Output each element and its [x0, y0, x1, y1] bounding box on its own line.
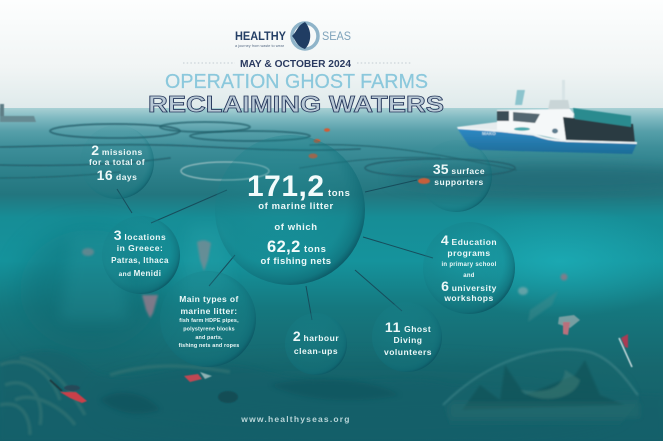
logo — [235, 22, 351, 49]
panel: 3 locations: Patras, Ithaca — [111, 256, 169, 265]
panel: 2 missions: for a total of — [89, 157, 145, 167]
panel: main types of litter: marine litter: — [180, 306, 238, 316]
panel: 2 missions: 16 days — [97, 167, 137, 183]
panel: education: 4 Education — [441, 232, 497, 248]
diver with fin near cage — [558, 315, 632, 367]
panel: 3 locations — [102, 216, 180, 294]
lower seabed and ropes — [0, 350, 663, 441]
panel: harbour clean-ups — [285, 313, 347, 375]
panel: main types of litter: Main types of — [179, 294, 239, 304]
panel: harbour clean-ups: 2 harbour — [293, 328, 339, 344]
panel: main types of litter — [160, 271, 256, 367]
surface fish farm nets — [0, 122, 516, 180]
title: operation ghost farms: OPERATION GHOST FARMS — [165, 70, 428, 93]
panel: 35 surface supporters: supporters — [434, 177, 484, 187]
sky background — [0, 0, 663, 112]
panel: 3 locations: in Greece: — [117, 243, 163, 253]
panel: main total: tons — [328, 188, 350, 199]
research boat: MAKO — [482, 131, 496, 136]
panel: 2 missions — [80, 125, 154, 199]
diver left — [50, 380, 87, 403]
panel: ghost diving volunteers: volunteers — [384, 347, 432, 357]
logo: SEAS — [322, 31, 351, 43]
panel: main total: 171,2 — [247, 170, 325, 203]
panel: 2 missions: 2 missions — [91, 142, 143, 158]
panel: main total — [215, 135, 365, 285]
panel: main types of litter: fishing nets and ropes — [179, 343, 239, 349]
panel: education: 6 university — [441, 278, 497, 294]
panel: 3 locations: and Menidi — [119, 269, 161, 278]
date heading: MAY & OCTOBER 2024 — [240, 59, 351, 70]
panel: main total: of marine litter — [258, 201, 334, 212]
panel: ghost diving volunteers: Diving — [394, 335, 422, 345]
panel: harbour clean-ups: clean-ups — [294, 346, 338, 356]
panel: education: and — [463, 273, 475, 279]
light beams and jellyfish — [60, 225, 568, 322]
title: reclaiming waters: RECLAIMING WATERS — [148, 91, 444, 117]
panel: main total: tons — [304, 244, 326, 255]
panel: main types of litter: fish farm HDPE pipes, — [179, 318, 239, 324]
panel: 3 locations: 3 locations — [114, 227, 166, 243]
panel: education — [423, 222, 515, 314]
sea background — [0, 108, 663, 441]
underwater fish cage — [443, 349, 640, 425]
panel: ghost diving volunteers: 11 Ghost — [385, 319, 431, 335]
panel: ghost diving volunteers — [372, 302, 442, 372]
panel: 35 surface supporters: 35 surface — [433, 161, 485, 177]
panel: main types of litter: and parts, — [195, 335, 223, 341]
website url: www.healthyseas.org — [240, 414, 351, 424]
panel: main total: of fishing nets — [261, 256, 331, 267]
logo: HEALTHY — [235, 31, 286, 43]
distant boat at left — [0, 104, 36, 122]
panel: 35 surface supporters — [420, 140, 492, 212]
connector lines — [117, 180, 433, 320]
diver right — [184, 372, 238, 403]
panel: education: workshops — [443, 293, 494, 303]
panel: main total: 62,2 — [267, 238, 301, 256]
panel: main types of litter: polystyrene blocks — [183, 326, 235, 332]
dotted divider — [183, 62, 411, 64]
panel: education: programs — [447, 248, 491, 258]
research boat — [457, 80, 637, 154]
orange buoys — [308, 128, 430, 184]
logo: a journey from waste to wear — [235, 44, 285, 48]
panel: education: in primary school — [441, 262, 497, 268]
panel: main total: of which — [274, 222, 318, 233]
